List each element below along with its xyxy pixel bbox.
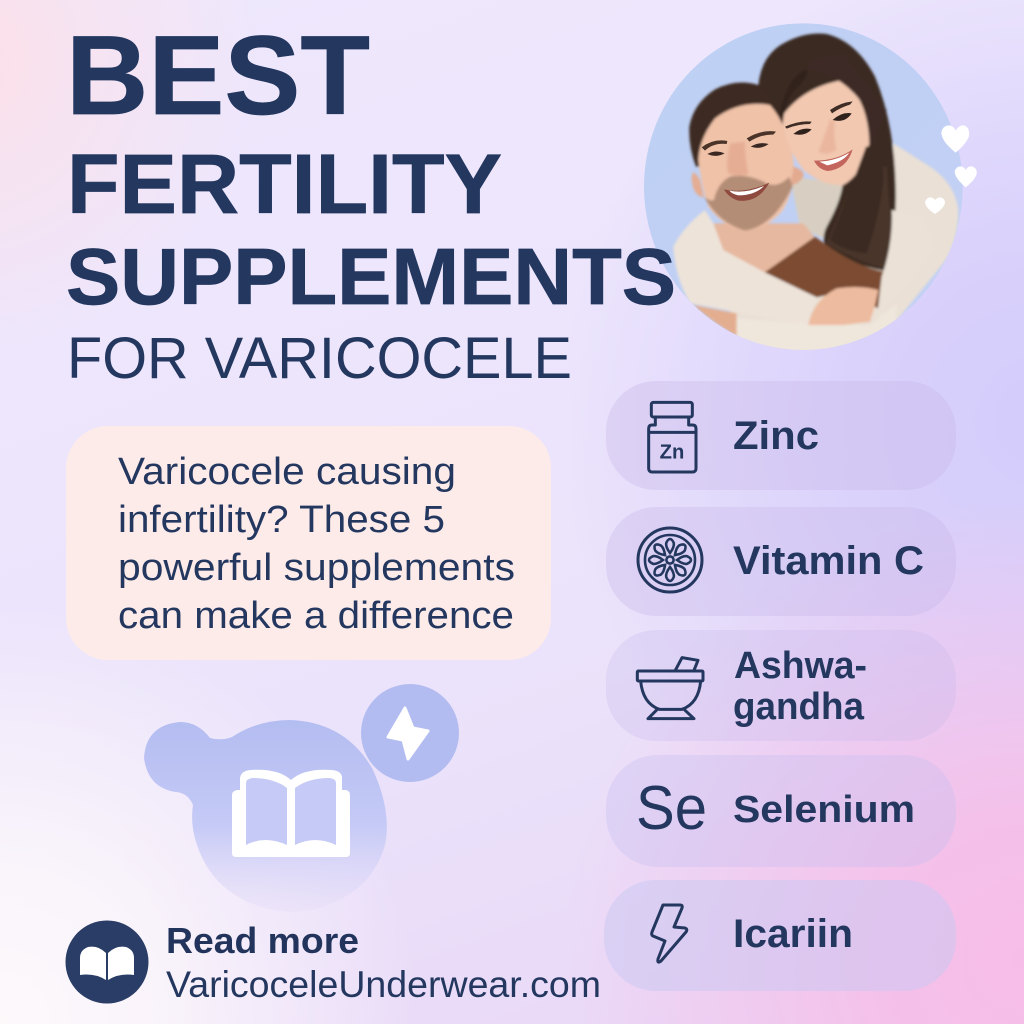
icon: mortar and pestle — [637, 658, 703, 719]
photo: smiling couple — [640, 20, 977, 353]
icon: navy book badge — [66, 920, 148, 1004]
icon: large heart — [941, 125, 969, 153]
icon: outlined lightning bolt — [652, 905, 687, 962]
blob shape — [144, 720, 387, 912]
footer: read more — [66, 920, 601, 1005]
icon: Se symbol: Se — [636, 774, 707, 843]
label: Icariin: Icariin — [733, 912, 853, 956]
icon: open book — [232, 770, 350, 857]
supplements list — [604, 381, 956, 991]
icon: Zn jar — [649, 402, 696, 472]
label: Ashwa-gandha: gandha — [733, 686, 865, 728]
read more text: Read more — [166, 920, 359, 961]
icon: white lightning bolt — [388, 708, 428, 759]
title — [66, 13, 676, 391]
title line: FOR VARICOCELE: FOR VARICOCELE — [67, 326, 572, 391]
title line: FERTILITY: FERTILITY — [67, 137, 502, 231]
label: Vitamin C: Vitamin C — [733, 539, 924, 583]
callout text: powerful supplements — [118, 547, 515, 589]
item: Vitamin C — [606, 507, 956, 616]
title line: SUPPLEMENTS: SUPPLEMENTS — [66, 232, 676, 321]
item: Icariin — [604, 880, 956, 991]
item: Selenium — [606, 755, 956, 867]
label: Ashwa-gandha: Ashwa- — [734, 645, 867, 687]
badge circle — [361, 684, 459, 782]
callout panel — [66, 426, 551, 660]
item: Ashwagandha — [606, 630, 956, 741]
illustration: book blob with lightning badge — [144, 684, 459, 912]
item: Zinc — [606, 381, 956, 490]
callout text: Varicocele causing — [118, 451, 456, 493]
callout text — [118, 451, 515, 637]
icon: small heart — [925, 197, 945, 214]
icon: Zn jar: Zn — [660, 440, 684, 463]
title line: BEST: BEST — [66, 13, 370, 138]
label: Zinc: Zinc — [733, 414, 819, 458]
icon: citrus slice — [638, 528, 702, 592]
icon: medium heart — [955, 166, 977, 187]
website url: VaricoceleUnderwear.com — [166, 964, 601, 1005]
label: Ashwa-gandha — [733, 645, 867, 728]
callout text: infertility? These 5 — [118, 499, 445, 541]
callout text: can make a difference — [118, 595, 514, 637]
label: Selenium: Selenium — [733, 789, 915, 831]
